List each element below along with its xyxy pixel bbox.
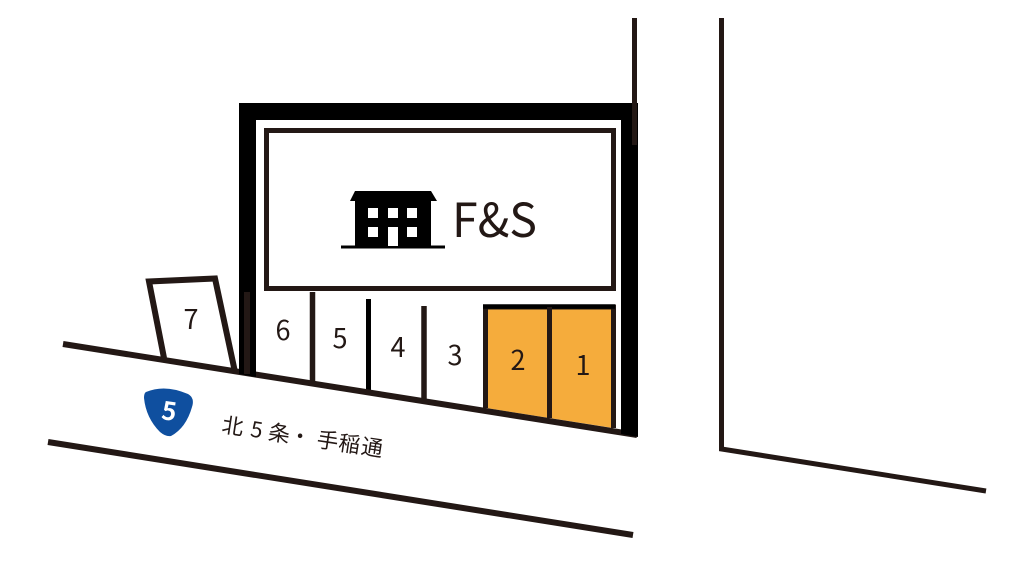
parking numbers: 7 <box>184 298 198 337</box>
building outer wall <box>239 103 638 437</box>
parking dividers <box>312 292 424 401</box>
road lower line <box>48 442 633 535</box>
parking numbers: 4 <box>390 326 406 365</box>
right road boundary <box>722 18 986 491</box>
road upper line <box>63 344 637 435</box>
parking space 7 <box>149 278 235 372</box>
parking numbers <box>184 298 590 383</box>
road name: 北5条・手稲通 <box>220 408 385 464</box>
building panel <box>266 130 614 288</box>
parking numbers: 1 <box>576 344 590 383</box>
building name: F&S <box>452 182 537 251</box>
parking numbers: 3 <box>448 334 462 373</box>
parking numbers: 6 <box>276 309 290 348</box>
orange parking spaces 1 and 2 <box>483 306 615 428</box>
parking numbers: 2 <box>510 339 526 378</box>
icon: building <box>341 191 445 248</box>
parking numbers: 5 <box>332 317 348 356</box>
icon: route 5 shield: 5 <box>160 391 179 429</box>
icon: route 5 shield <box>144 388 193 436</box>
vertical road line at top of building <box>632 18 637 145</box>
